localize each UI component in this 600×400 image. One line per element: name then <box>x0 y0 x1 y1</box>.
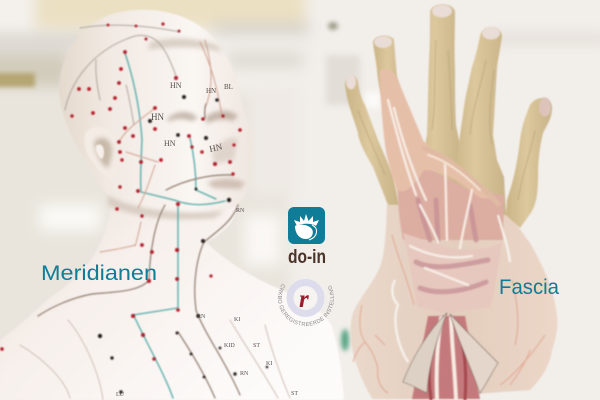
extensor tendon flap <box>380 69 496 199</box>
fascia highlights <box>392 215 510 362</box>
point labels: HN <box>206 87 216 95</box>
point labels: HN <box>170 81 182 90</box>
label: Fascia: Fascia <box>499 275 559 299</box>
ring finger <box>373 36 405 110</box>
fingers <box>345 4 552 228</box>
middle finger <box>412 4 462 210</box>
facial shading <box>108 39 245 219</box>
index finger <box>450 28 506 215</box>
muscle striping <box>388 100 498 292</box>
point labels: LU <box>116 392 125 398</box>
point labels: HN <box>151 112 164 122</box>
red r monogram: r <box>299 286 309 313</box>
point labels: KID <box>224 343 235 349</box>
label: Meridianen: Meridianen <box>41 261 157 285</box>
little finger <box>345 76 399 205</box>
black points <box>98 95 268 394</box>
mannequin: acupuncture model <box>0 10 344 400</box>
point labels: HN <box>164 139 176 148</box>
wrist fascia folds <box>403 313 498 393</box>
ear <box>84 127 118 178</box>
point labels: KI <box>234 317 240 323</box>
acupuncture points <box>0 22 242 361</box>
point labels: RN <box>236 208 245 214</box>
point labels: ST <box>253 343 260 349</box>
icon: lotus on teal square <box>288 207 325 244</box>
point labels: BL <box>224 83 233 91</box>
point labels: ST <box>291 391 298 397</box>
point labels: RN <box>240 371 249 377</box>
point labels: RN <box>197 314 206 320</box>
forearm fascia flaps <box>351 205 557 399</box>
point labels: KI <box>266 361 272 367</box>
mannequin torso and shoulders <box>0 200 344 400</box>
fingernails <box>346 4 551 116</box>
anatomical hand with fascia <box>345 4 557 399</box>
meridian lines <box>20 25 290 400</box>
finger texture <box>358 40 535 200</box>
logo: do-in <box>288 207 326 268</box>
wrist band of fascia <box>403 233 502 313</box>
thumb <box>506 98 552 228</box>
mannequin head <box>59 10 251 213</box>
palm muscles <box>397 165 504 240</box>
fascia veins <box>353 235 545 393</box>
do-in wordmark: do-in <box>288 247 326 268</box>
seal: CRKBO registered institution <box>278 279 334 326</box>
circular seal text: CRKBO GEREGISTREERDE INSTELLING <box>278 284 334 326</box>
lower forearm muscles <box>412 316 480 399</box>
point labels <box>116 81 298 398</box>
point labels: HN <box>208 141 224 154</box>
